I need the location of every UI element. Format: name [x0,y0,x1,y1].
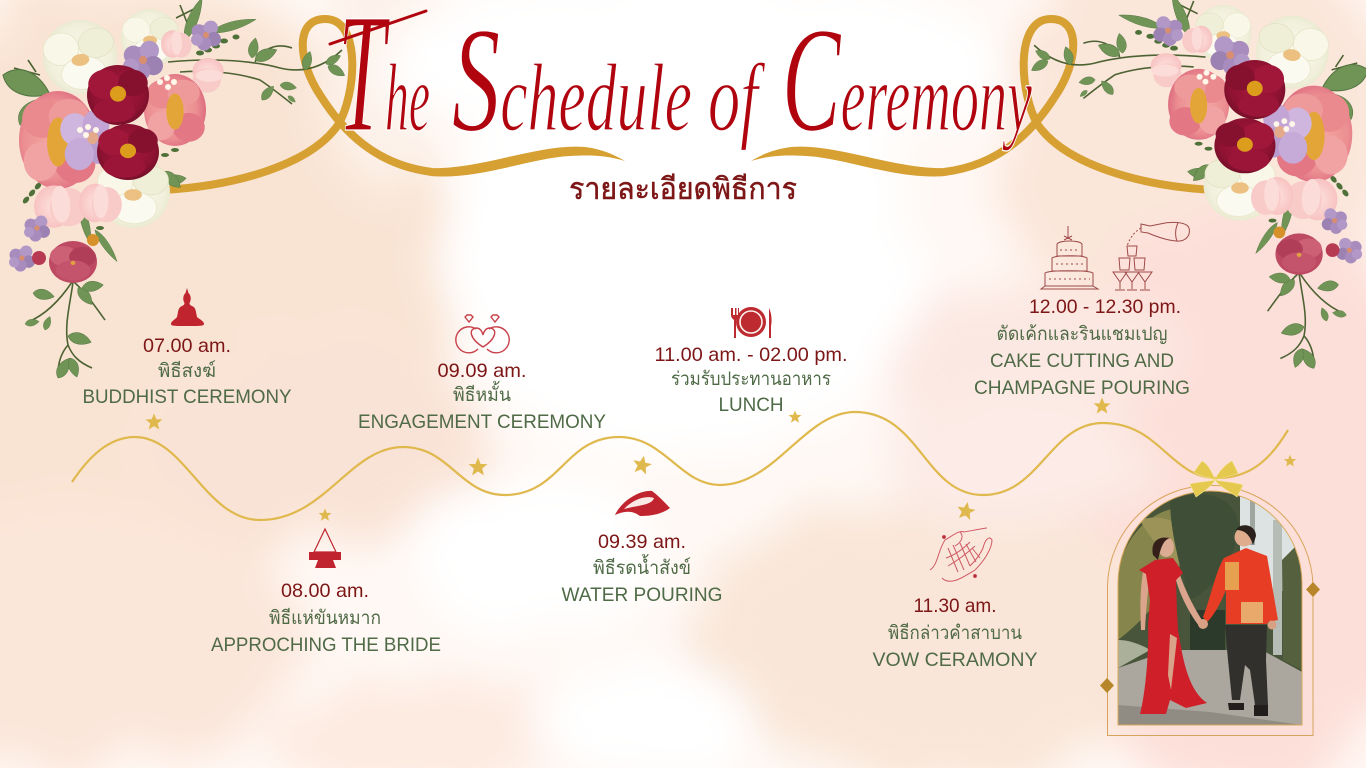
item: cake cutting and champagne: 12.00 - 12.30 pm. [1029,296,1181,318]
item: lunch [654,307,848,416]
woman [1139,537,1207,714]
item: water pouring: พิธีรดน้ำสังข์ [593,554,691,579]
icon: tiered cake [1041,226,1098,289]
star markers [146,398,1296,521]
title: Ceremony [782,0,1032,163]
icon: buddha [171,288,204,326]
item: cake cutting and champagne: ตัดเค้กและรินแชมเปญ [996,324,1168,345]
item: water pouring: WATER POURING [562,585,722,606]
item: buddhist ceremony: 07.00 am. [143,335,231,357]
floral bouquet: top left [0,0,347,380]
item: vow ceremony [872,528,1038,671]
item: lunch: ร่วมรับประทานอาหาร [671,369,831,390]
item: vow ceremony: VOW CERAMONY [872,650,1038,671]
item: approaching the bride: APPROCHING THE BRIDE [211,635,441,656]
photo: couple holding hands [1118,491,1302,725]
item: buddhist ceremony [82,288,292,408]
icon: khan mak tray [309,529,341,568]
item: cake cutting and champagne: CAKE CUTTING AND [990,351,1174,372]
item: cake cutting and champagne [974,222,1190,399]
item: vow ceremony: 11.30 am. [914,595,996,617]
icon: joined hands [930,528,992,581]
item: approaching the bride [211,529,441,656]
gold ribbon: right [751,19,1213,190]
icon: gold bow [1190,461,1243,497]
icon: rings and heart [456,315,509,353]
title: Schedule [452,0,692,163]
item: engagement ceremony: 09.09 am. [438,360,526,382]
title flourish [330,11,426,44]
item: lunch: LUNCH [718,395,784,416]
title: of [708,44,766,151]
man [1198,525,1278,716]
item: water pouring: 09.39 am. [598,531,686,553]
item: engagement ceremony [358,315,606,433]
icon: champagne tower [1113,222,1189,290]
icon: plate and cutlery [731,307,772,338]
gold ribbon: left [163,19,625,190]
item: lunch: 11.00 am. - 02.00 pm. [654,344,848,366]
item: buddhist ceremony: BUDDHIST CEREMONY [82,387,292,408]
item: buddhist ceremony: พิธีสงฆ์ [158,360,216,382]
ornament: gold sparkles [1100,582,1320,693]
photo frame: arch [1108,485,1313,736]
subtitle: รายละเอียดพิธีการ [569,173,797,206]
item: engagement ceremony: พิธีหมั้น [453,381,511,406]
item: approaching the bride: พิธีแห่ขันหมาก [269,607,381,629]
item: approaching the bride: 08.00 am. [281,580,369,602]
item: water pouring [562,491,722,606]
item: vow ceremony: พิธีกล่าวคำสาบาน [888,622,1022,644]
timeline wave [72,412,1288,520]
item: cake cutting and champagne: CHAMPAGNE POURING [974,378,1190,399]
item: engagement ceremony: ENGAGEMENT CEREMONY [358,412,606,433]
title [338,0,1032,167]
floral bouquet: top right [1029,0,1366,371]
icon: conch shell [615,491,670,516]
